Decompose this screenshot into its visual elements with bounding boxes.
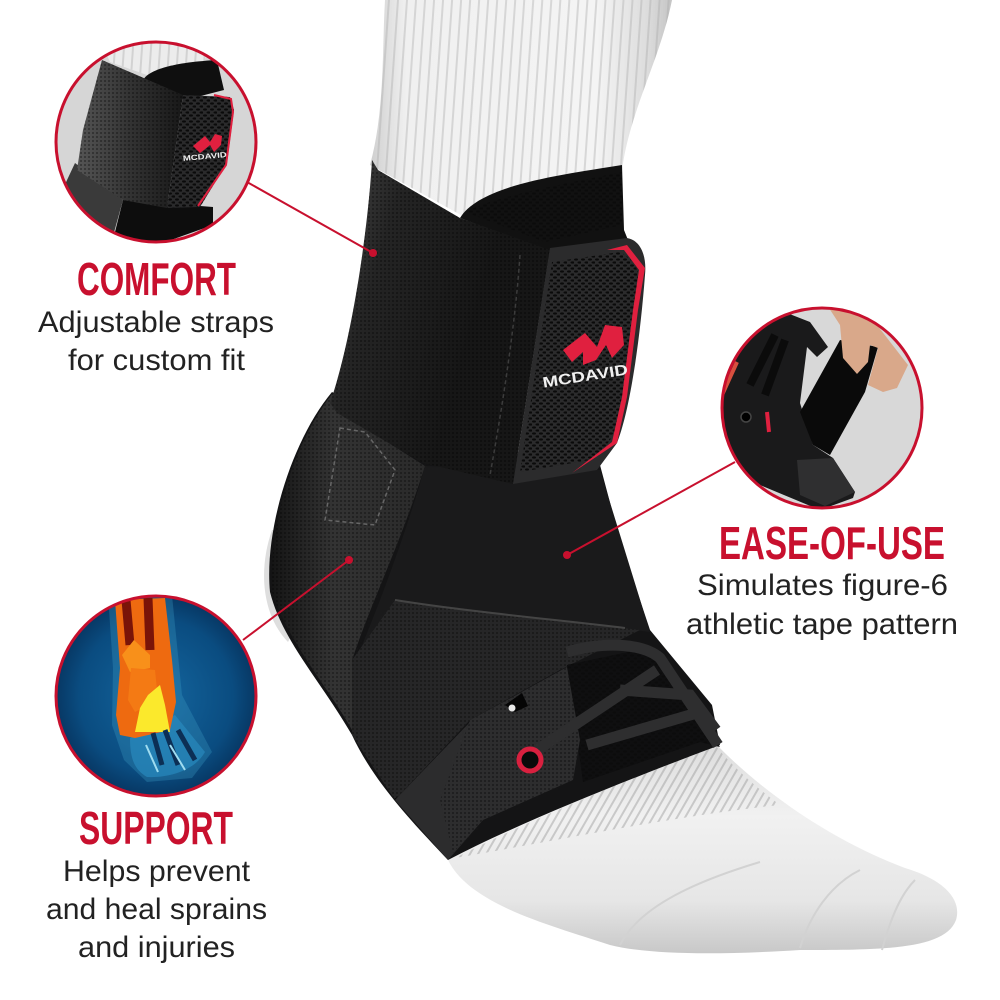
logo mark: [563, 325, 624, 365]
cuff mesh: [460, 165, 628, 252]
text: ease of use: [686, 569, 958, 641]
lace bands: [537, 645, 718, 750]
ankle brace body: [269, 392, 720, 860]
red eyelet: [519, 749, 541, 771]
text: comfort: Adjustable straps: [38, 306, 274, 339]
text: support: [46, 855, 267, 964]
lace mesh: [567, 648, 720, 782]
comfort strap: [330, 160, 550, 484]
heel sock edge: [264, 530, 300, 642]
logo tab: [513, 238, 645, 484]
text: support: and injuries: [78, 931, 235, 964]
upper sock: [370, 0, 672, 220]
text: support: and heal sprains: [46, 893, 267, 926]
leader line: ease of use: [563, 462, 735, 559]
heading: support: SUPPORT: [79, 802, 233, 854]
circle: comfort detail: [56, 40, 256, 245]
text: support: Helps prevent: [63, 855, 251, 888]
heading: comfort: COMFORT: [77, 253, 236, 305]
circle: comfort detail: MCDAVID: [182, 150, 228, 163]
lace panel: [440, 667, 580, 853]
foot sock: [448, 743, 957, 953]
circle: support detail: [56, 595, 256, 796]
heel panel: [272, 394, 425, 730]
figure-6 strap: [352, 600, 640, 800]
leader line: support: [243, 556, 353, 640]
text: ease of use: Simulates figure-6: [697, 569, 948, 602]
eyelet hole: [505, 693, 528, 712]
circle: ease of use detail: [720, 305, 922, 510]
logo wordmark: MCDAVID: [541, 361, 629, 392]
text: comfort: for custom fit: [68, 344, 246, 377]
text: comfort: [38, 306, 274, 377]
upper front panel: [360, 466, 650, 650]
leader line: comfort: [247, 182, 377, 257]
text: ease of use: athletic tape pattern: [686, 608, 958, 641]
lower wrap: [395, 722, 483, 860]
